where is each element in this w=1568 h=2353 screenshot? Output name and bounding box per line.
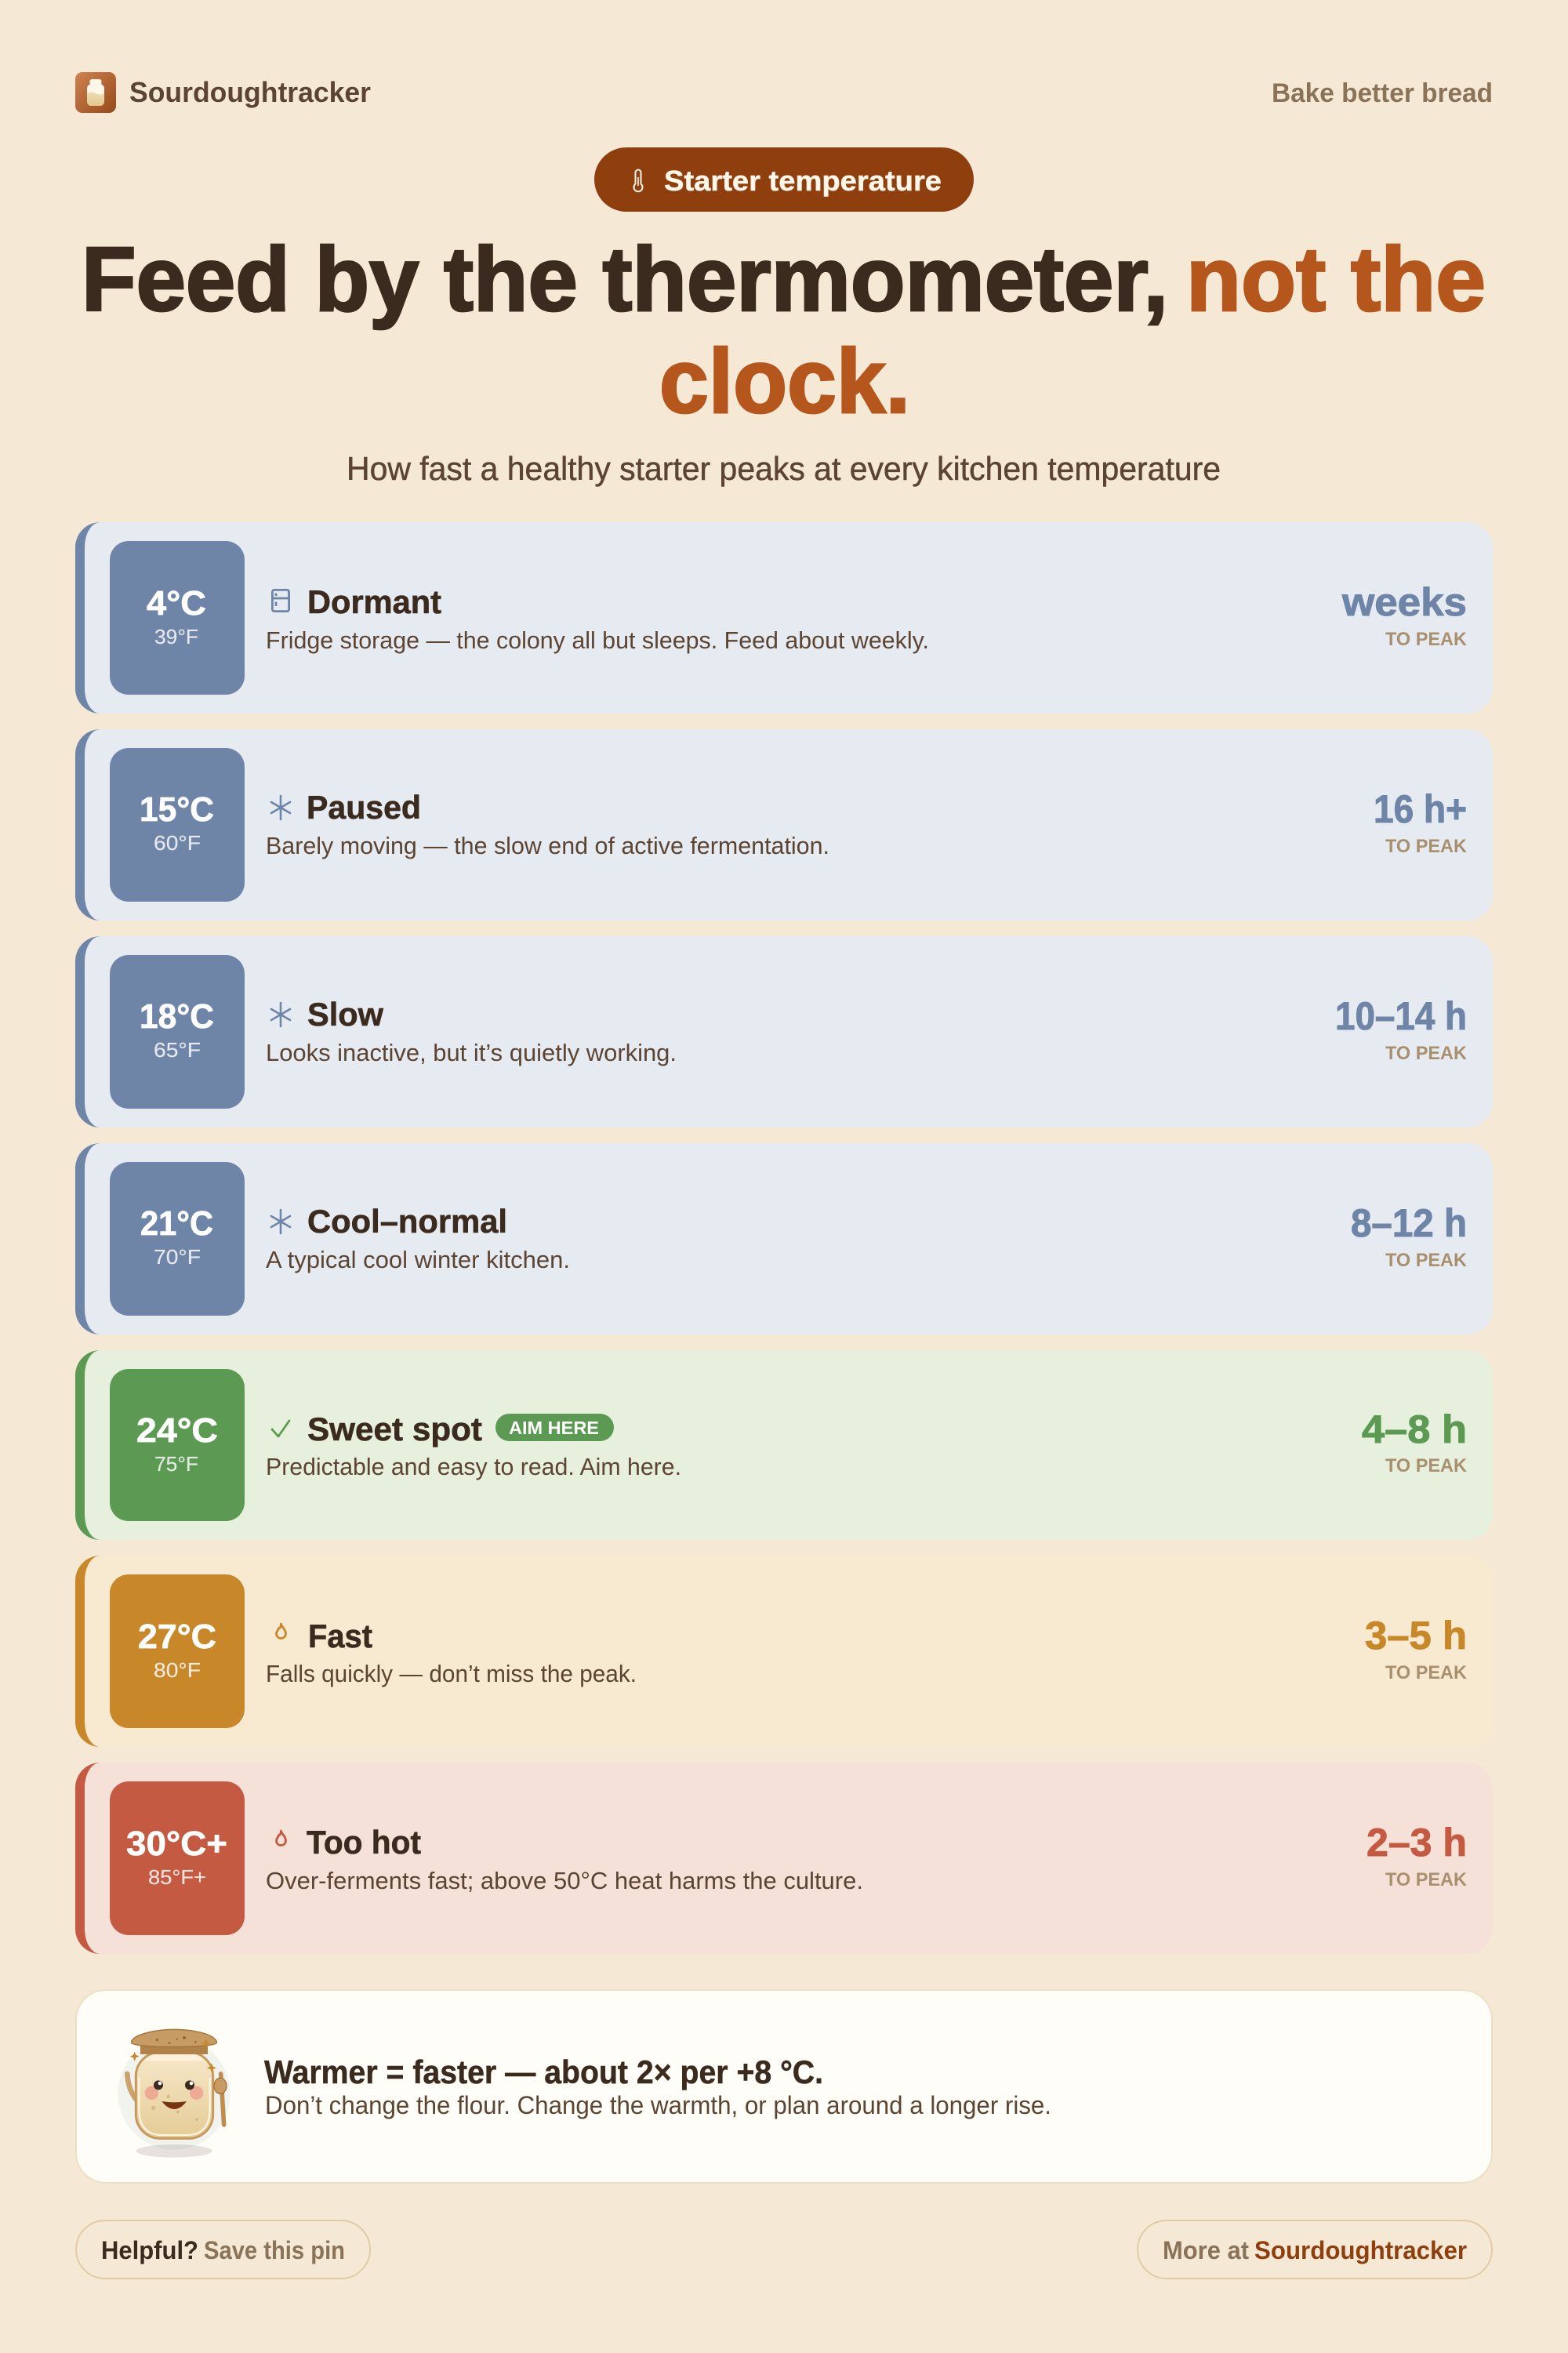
- footer pill: more at sourdoughtracker: [1138, 2220, 1492, 2279]
- description: Looks inactive, but it’s quietly working.: [266, 1039, 677, 1066]
- temperature swatch: [110, 748, 245, 902]
- panel: 4°C dormant: [75, 522, 1493, 714]
- mascot: smiling starter jar: [118, 2029, 230, 2158]
- time to peak: TO PEAK: [1385, 1455, 1468, 1476]
- icon: starter jar logo: [75, 72, 116, 113]
- temperature swatch: 65°F: [154, 1038, 201, 1062]
- panel: 27°C fast: [75, 1556, 1493, 1747]
- temperature swatch: [110, 1781, 245, 1935]
- description: Fridge storage — the colony all but sleeps. Feed about weekly.: [266, 626, 929, 654]
- time to peak: 8–12 h: [1351, 1201, 1467, 1245]
- callout heading: Warmer = faster — about 2× per +8 °C.: [264, 2053, 823, 2090]
- time to peak: TO PEAK: [1385, 1250, 1468, 1271]
- status name: Sweet spot: [307, 1411, 482, 1447]
- icon: check mark: [272, 1421, 289, 1436]
- temperature swatch: 18°C: [140, 997, 214, 1036]
- time to peak: TO PEAK: [1385, 836, 1468, 857]
- temperature swatch: [110, 955, 245, 1109]
- temperature swatch: 27°C: [138, 1618, 216, 1656]
- description: Falls quickly — don’t miss the peak.: [266, 1660, 637, 1687]
- pill label: Starter temperature: [664, 165, 942, 197]
- time to peak: weeks: [1341, 580, 1467, 624]
- footer pill: save this pin: [76, 2220, 370, 2279]
- time to peak: [1362, 1407, 1468, 1476]
- badge: aim here: AIM HERE: [509, 1418, 599, 1438]
- panel: 15°C paused: [75, 729, 1493, 921]
- temperature swatch: 15°C: [140, 790, 214, 829]
- time to peak: 16 h+: [1374, 787, 1467, 831]
- status name: Slow: [307, 996, 383, 1033]
- footer pill: save this pin: Helpful?: [101, 2236, 198, 2264]
- icon: thermometer: [633, 170, 643, 191]
- description: Predictable and easy to read. Aim here.: [266, 1453, 681, 1480]
- status name: Fast: [308, 1618, 372, 1654]
- icon: fridge: [272, 590, 289, 612]
- description: Barely moving — the slow end of active fermentation.: [266, 832, 829, 859]
- title: [82, 228, 1486, 432]
- temperature swatch: 39°F: [154, 625, 198, 648]
- description: A typical cool winter kitchen.: [266, 1246, 570, 1273]
- title: Feed by the thermometer,: [82, 228, 1168, 330]
- footer pill: more at sourdoughtracker: More at: [1163, 2236, 1249, 2264]
- temperature swatch: 70°F: [154, 1245, 201, 1269]
- brand name: Sourdoughtracker: [129, 76, 371, 108]
- panel: 24°C sweet spot: [75, 1350, 1493, 1540]
- panel: 18°C slow: [75, 936, 1493, 1127]
- time to peak: [1367, 1821, 1468, 1890]
- title: clock.: [659, 330, 910, 432]
- time to peak: 10–14 h: [1335, 994, 1467, 1038]
- temperature swatch: 4°C: [147, 584, 206, 623]
- time to peak: [1365, 1614, 1468, 1683]
- time to peak: 2–3 h: [1367, 1821, 1467, 1865]
- time to peak: 4–8 h: [1362, 1407, 1467, 1451]
- icon: flame: [276, 1831, 285, 1846]
- temperature swatch: [110, 1162, 245, 1316]
- status name: Cool–normal: [307, 1203, 507, 1240]
- status name: Too hot: [307, 1824, 421, 1861]
- icon: flame: [276, 1624, 285, 1639]
- time to peak: [1351, 1201, 1468, 1271]
- temperature swatch: 75°F: [154, 1452, 198, 1476]
- description: Over-ferments fast; above 50°C heat harms the culture.: [266, 1867, 863, 1894]
- time to peak: TO PEAK: [1385, 629, 1468, 650]
- time to peak: [1374, 787, 1468, 857]
- badge: aim here: [495, 1414, 614, 1441]
- temperature swatch: 85°F+: [148, 1865, 206, 1889]
- footer pill: more at sourdoughtracker: Sourdoughtracker: [1254, 2236, 1467, 2264]
- icon: snowflake: [271, 1210, 290, 1233]
- temperature swatch: [110, 1574, 245, 1728]
- tagline: Bake better bread: [1272, 78, 1493, 108]
- panel: 21°C cool-normal: [75, 1143, 1493, 1334]
- title: not the: [1186, 228, 1486, 330]
- icon: snowflake: [271, 796, 290, 819]
- temperature swatch: 80°F: [154, 1658, 201, 1682]
- time to peak: [1335, 994, 1468, 1064]
- icon: snowflake: [271, 1003, 290, 1026]
- temperature swatch: 60°F: [154, 831, 201, 855]
- temperature swatch: 30°C+: [126, 1825, 227, 1863]
- time to peak: 3–5 h: [1365, 1614, 1467, 1658]
- time to peak: TO PEAK: [1385, 1662, 1468, 1683]
- temperature swatch: [110, 1369, 245, 1521]
- subtitle: How fast a healthy starter peaks at every kitchen temperature: [347, 450, 1221, 487]
- callout text: Don’t change the flour. Change the warmth, or plan around a longer rise.: [265, 2091, 1051, 2119]
- time to peak: TO PEAK: [1385, 1043, 1468, 1064]
- panel: 30°C+ too hot: [75, 1763, 1493, 1954]
- temperature swatch: 21°C: [140, 1204, 213, 1243]
- time to peak: [1341, 580, 1468, 650]
- time to peak: TO PEAK: [1385, 1869, 1468, 1890]
- temperature swatch: [110, 541, 245, 695]
- footer pill: save this pin: Save this pin: [204, 2236, 345, 2264]
- status name: Dormant: [307, 583, 441, 620]
- status name: Paused: [307, 789, 421, 826]
- brand header: [75, 72, 371, 113]
- topic pill: [594, 147, 974, 212]
- temperature swatch: 24°C: [136, 1411, 218, 1450]
- callout: warmer is faster: [76, 1990, 1492, 2183]
